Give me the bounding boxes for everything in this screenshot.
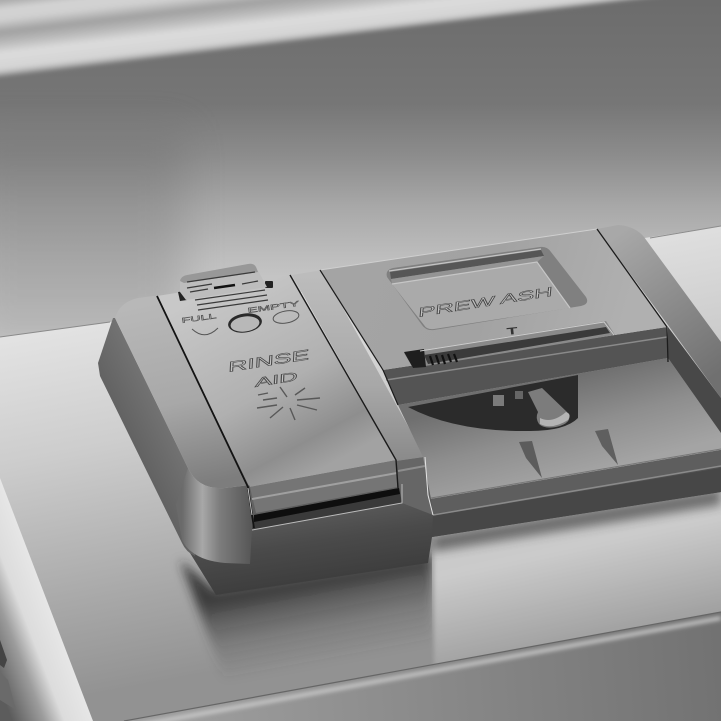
RINSE label: RINSE	[228, 347, 310, 376]
tray tab left	[519, 441, 542, 478]
side rail bottom left	[0, 478, 93, 721]
rinse aid lid	[157, 275, 402, 530]
panel: dispenser side face	[98, 318, 195, 556]
pivot arm	[528, 388, 570, 428]
right bezel	[597, 225, 721, 398]
panel: dispenser lower block	[180, 440, 721, 595]
band highlight on base	[398, 466, 425, 471]
panel: tray interior	[398, 358, 721, 499]
level indicator window	[227, 311, 263, 335]
right bezel inner wall	[668, 327, 721, 433]
dispenser unit	[98, 225, 721, 595]
panel: rinse aid bezel	[115, 296, 249, 488]
PREWASH label: PREW ASH	[418, 284, 553, 320]
tray cast shadow	[432, 488, 721, 552]
back wall of dishwasher	[0, 0, 721, 350]
panel: center strip base	[397, 457, 433, 515]
panel: center strip	[292, 270, 425, 461]
panel: lower corner highlight	[176, 468, 252, 564]
prewash lid front face	[383, 327, 668, 405]
dishwasher floor	[0, 226, 721, 721]
tray front rim	[425, 449, 721, 537]
arrow mark: T	[506, 326, 518, 338]
FULL label: FULL	[181, 312, 218, 325]
prewash lid top	[320, 229, 667, 370]
prewash recess	[387, 247, 587, 330]
prewash lid edges	[320, 229, 597, 405]
EMPTY label: EMPTY	[247, 299, 301, 315]
full indicator arc	[192, 328, 218, 335]
right bezel edge	[597, 229, 668, 362]
dispenser cast shadow	[180, 555, 432, 680]
bright top band on back wall	[0, 0, 710, 79]
front lip of floor	[124, 612, 721, 721]
dark semicircular cavity	[408, 375, 578, 431]
tray tab right	[595, 429, 618, 465]
latch slot	[404, 321, 615, 368]
inner tray hub pieces	[493, 391, 523, 406]
AID label: AID	[255, 368, 298, 390]
lid latch tab	[178, 264, 273, 310]
icon: rinse sparkle	[257, 387, 320, 420]
empty indicator ellipse	[272, 309, 300, 325]
